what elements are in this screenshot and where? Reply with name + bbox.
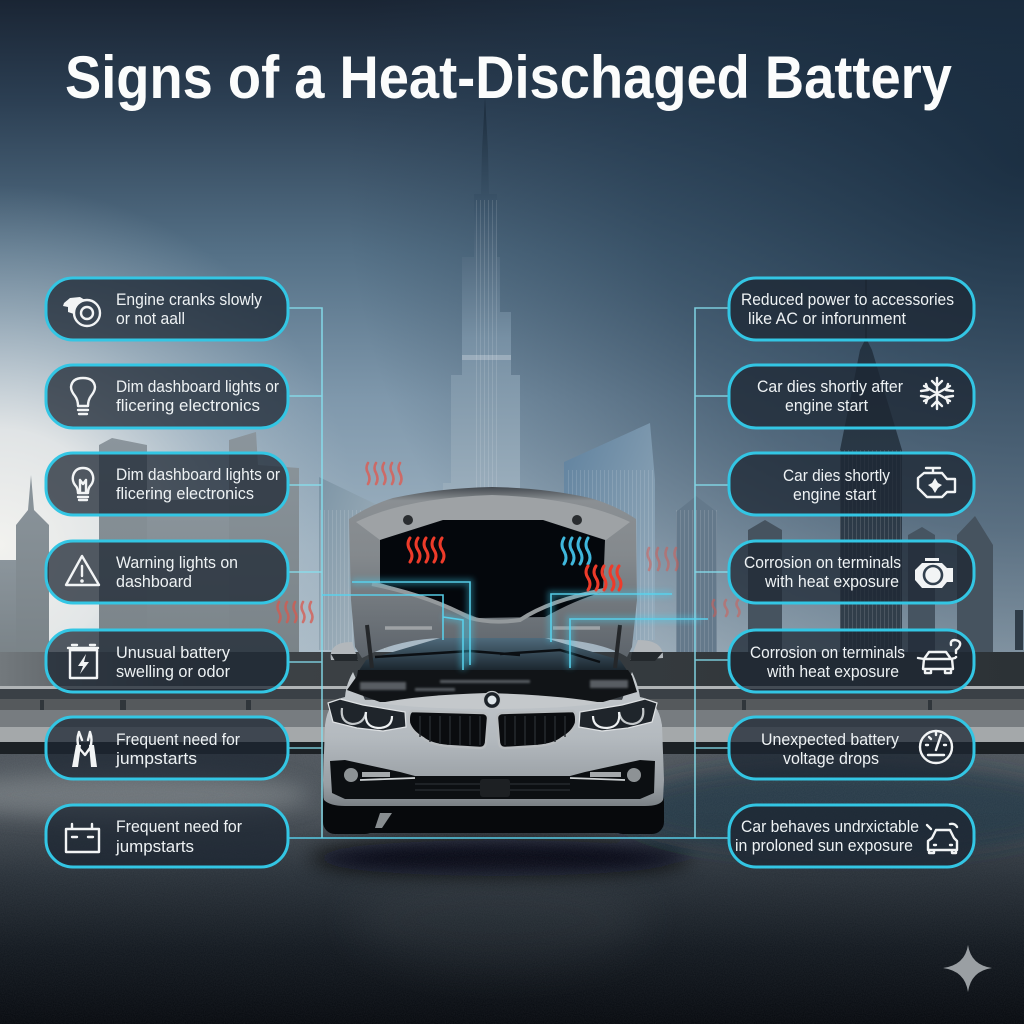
heat: left of car	[278, 602, 312, 622]
label: Frequent need for	[116, 818, 242, 836]
car body	[323, 672, 664, 806]
panel: reduced power	[729, 278, 974, 340]
panel: corrosion two	[729, 630, 974, 692]
label: Frequent need for	[116, 731, 240, 749]
wing mirrors	[331, 640, 663, 661]
label: engine start	[793, 486, 876, 504]
panel: car dies two	[729, 453, 974, 515]
label: jumpstarts	[115, 750, 197, 768]
label: Reduced power to accessories	[741, 291, 954, 309]
label: Corrosion on terminals	[750, 644, 905, 662]
panel: battery swelling	[46, 630, 288, 692]
cool waves: inside hood	[562, 538, 590, 564]
label: Car dies shortly after	[757, 378, 903, 396]
label: with heat exposure	[764, 573, 899, 591]
panel: voltage drops	[729, 717, 974, 779]
wheels and underbody	[323, 790, 664, 834]
panel: unpredictable car	[729, 805, 974, 867]
icon: solid engine	[915, 558, 953, 588]
heat: lower hood	[586, 566, 621, 590]
icon: warning triangle	[66, 556, 99, 585]
panel: jumpstarts two	[46, 805, 288, 867]
label: flicering electronics	[116, 485, 254, 503]
icon: battery	[66, 824, 99, 852]
background: city skyline	[0, 97, 1024, 688]
panel: corrosion one	[729, 541, 974, 603]
panel: dim lights two	[46, 453, 288, 515]
label: or not aall	[116, 310, 185, 328]
sparkle watermark	[943, 945, 992, 992]
connector lines	[289, 308, 728, 838]
heading: Signs of a Heat-Dischaged Battery	[65, 44, 953, 111]
label: Warning lights on	[116, 554, 238, 572]
hood front panel	[380, 693, 603, 709]
icon: snowflake	[921, 378, 953, 409]
heat: inside hood	[408, 538, 444, 562]
heat: above hood	[366, 463, 402, 484]
label: engine start	[785, 397, 868, 415]
icon: filament bulb	[73, 468, 93, 500]
label: Unusual battery	[116, 644, 231, 662]
heat: right of car	[648, 548, 740, 616]
panel: engine cranks slowly	[46, 278, 288, 340]
open hood	[349, 487, 637, 668]
label: Dim dashboard lights or	[116, 466, 280, 484]
engine bay	[347, 670, 637, 702]
glow behind hood connectors	[352, 582, 700, 670]
label: voltage drops	[783, 750, 879, 768]
panel: warning lights	[46, 541, 288, 603]
label: in proloned sun exposure	[735, 837, 913, 855]
background: guard rail	[0, 686, 1024, 755]
label: swelling or odor	[116, 663, 230, 681]
icon: check engine	[918, 468, 955, 497]
icon: jumper clamps	[72, 732, 97, 767]
icon: car with signals	[927, 824, 957, 853]
kidney grille	[409, 711, 576, 748]
label: Dim dashboard lights or	[116, 378, 279, 396]
lower bumper intake	[330, 760, 655, 799]
label: Corrosion on terminals	[744, 554, 901, 572]
label: Unexpected battery	[761, 731, 900, 749]
label: flicering electronics	[116, 397, 260, 415]
panel: dim lights one	[46, 365, 288, 428]
badge	[484, 692, 500, 708]
panel: car dies one	[729, 365, 974, 428]
icon: car with question mark	[918, 640, 960, 673]
label: Car dies shortly	[783, 467, 891, 485]
icon: battery with bolt	[68, 645, 98, 678]
background: sky	[0, 0, 1024, 700]
label: like AC or inforunment	[748, 310, 906, 328]
icon: gauge	[920, 731, 952, 763]
label: dashboard	[116, 573, 192, 591]
panel: jumpstarts one	[46, 717, 288, 779]
icon: starter motor	[63, 297, 100, 326]
icon: light bulb	[71, 378, 95, 414]
heat waves	[278, 463, 740, 622]
label: with heat exposure	[766, 663, 899, 681]
car with open hood	[323, 487, 664, 834]
windscreen	[358, 638, 628, 672]
background: wet road	[0, 754, 1024, 1024]
label: jumpstarts	[115, 838, 194, 856]
label: Engine cranks slowly	[116, 291, 263, 309]
label: Car behaves undrxictable	[741, 818, 919, 836]
headlights	[328, 699, 657, 731]
